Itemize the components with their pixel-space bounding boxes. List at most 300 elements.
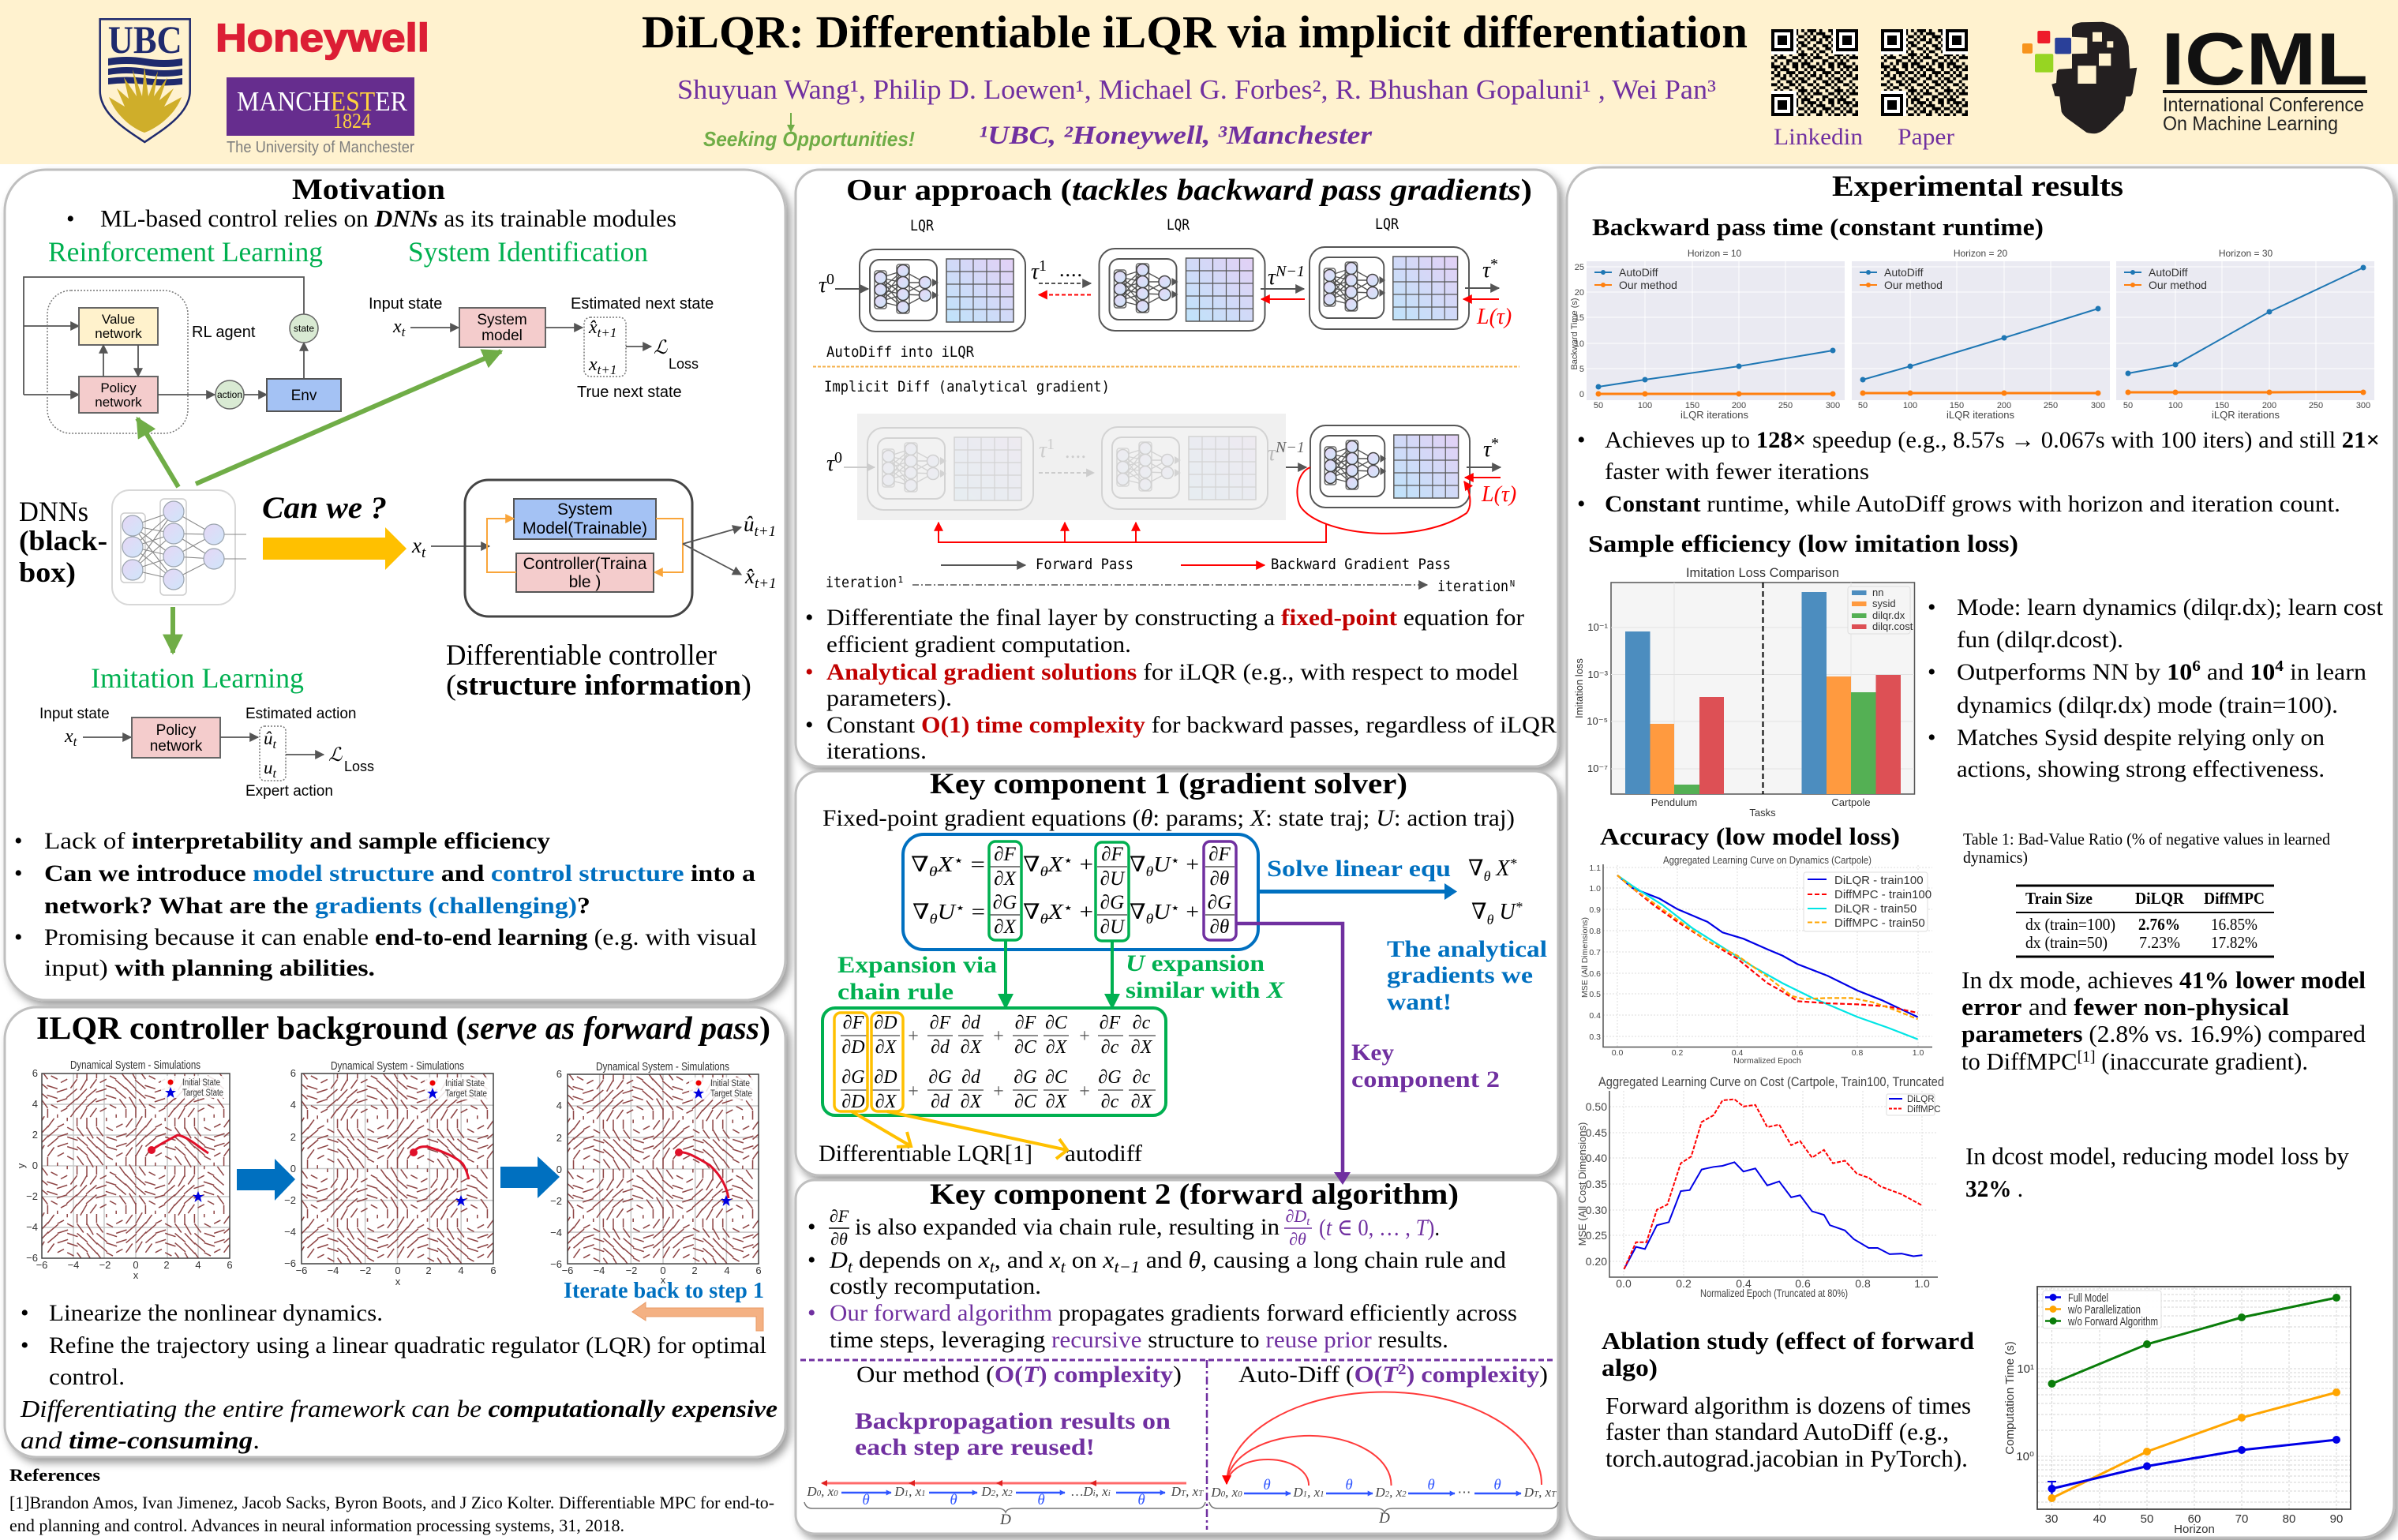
- diagram: system identification: x: [589, 354, 598, 375]
- references: [1]Brandon Amos, Ivan Jimenez, Jacob Sacks, Byron Boots, and J Zico Kolter. Differentiable MPC for end-to-: [9, 1493, 774, 1512]
- icon: UBC crest: UBC: [108, 17, 182, 62]
- chart: horizon 20: 50: [1858, 401, 1868, 410]
- QR code: paper: [1881, 29, 1968, 116]
- diagram: auto-diff chain: D1, x1: [1292, 1485, 1325, 1500]
- diagram: autodiff into iLQR: τ: [819, 273, 826, 298]
- callout: iterate back: Iterate back to step 1: [564, 1279, 764, 1303]
- diagram: differentiable controller: t+1: [755, 575, 777, 592]
- label: can we: Can we ?: [262, 491, 387, 525]
- chart: horizon 20: 300: [2091, 401, 2105, 410]
- chart: simulation iteration 3: x: [661, 1274, 666, 1286]
- chart: imitation loss comparison: sysid: [1872, 598, 1896, 609]
- chart: horizon 20: Horizon = 20: [1954, 248, 2008, 259]
- subheading: ablation study: Ablation study (effect of forward: [1602, 1327, 1974, 1355]
- callout: backpropagation reuse: [855, 1408, 1171, 1460]
- chart: learning curve on dynamics: 0.2: [1672, 1048, 1683, 1058]
- bullets: key component 2: depends on: [852, 1247, 979, 1273]
- chart: ablation computation time: 70: [2235, 1512, 2248, 1526]
- chart: horizon 30: AutoDiff: [2149, 266, 2188, 279]
- diagram: RL agent: network: [95, 326, 142, 341]
- chart: learning curve on cost: 0.40: [1586, 1152, 1607, 1164]
- chart: learning curve on cost: 0.50: [1586, 1100, 1607, 1113]
- bullets: ILQR: Refine the trajectory using a linear quadratic regulator (LQR) for optimal: [49, 1332, 766, 1358]
- diagram: auto-diff chain: θ: [1493, 1477, 1501, 1493]
- equation: chain rule expansion: ∂c: [1133, 1013, 1151, 1033]
- label: expansion via chain rule: Expansion via: [837, 952, 997, 978]
- chart: learning curve on dynamics: 1.1: [1589, 864, 1601, 873]
- diagram: autodiff into iLQR: ....: [1059, 258, 1082, 281]
- bullets: key component 2: ∂θ: [830, 1229, 848, 1249]
- chart: learning curve on dynamics: 0.6: [1792, 1048, 1803, 1058]
- logo: ICML: ICML: [2161, 17, 2368, 100]
- diagram: implicit diff: τ: [1039, 438, 1047, 463]
- chart: simulation iteration 2: −6: [296, 1265, 307, 1276]
- chart: horizon 30: 300: [2356, 401, 2370, 410]
- chart: simulation iteration 1: Dynamical System - Simulations: [70, 1059, 200, 1072]
- diagram: autodiff into iLQR: 0: [826, 271, 834, 288]
- chart: simulation iteration 2: 2: [290, 1131, 296, 1143]
- bullets: our approach: iterations.: [826, 738, 927, 764]
- equation: chain rule expansion: ∂C: [1045, 1013, 1068, 1033]
- legend: passes: Backward Gradient Pass: [1271, 556, 1451, 573]
- callout: analytical gradients wanted: The analytical: [1387, 936, 1547, 962]
- logo: University of Manchester: The University of Manchester: [227, 139, 414, 156]
- equation: fixed point system: +: [1180, 900, 1199, 924]
- panel: our approach: [796, 170, 1558, 766]
- chart: simulation iteration 2: 4: [290, 1099, 296, 1111]
- chart: learning curve on dynamics: 0.6: [1589, 969, 1601, 979]
- chart: imitation loss comparison: 10⁻¹: [1587, 621, 1609, 633]
- diagram: forward algorithm chain: D1, x1: [894, 1484, 926, 1499]
- bullets: sample efficiency: 10: [2250, 658, 2284, 685]
- bullets: key component 2: , and: [995, 1247, 1050, 1273]
- chart: simulation iteration 3: 6: [556, 1068, 562, 1080]
- bullets: our approach: Analytical gradient solutions for iLQR (e.g., with respect to model: [826, 659, 1519, 685]
- text: dx mode results: error and fewer non-physical: [1961, 993, 2289, 1021]
- equation: fixed point system: θ: [1146, 864, 1153, 879]
- equation: chain rule expansion: ∂X: [1131, 1092, 1153, 1112]
- chart: ablation computation time: w/o Forward Algorithm: [2067, 1315, 2158, 1328]
- bullets: key component 2: [807, 1206, 1517, 1353]
- chart: ablation computation time: 60: [2188, 1512, 2201, 1526]
- chart: learning curve on cost: 0.45: [1586, 1126, 1607, 1139]
- equation: chain rule expansion: +: [908, 1026, 919, 1047]
- equation: chain rule expansion: ∂c: [1101, 1092, 1119, 1112]
- chart: ablation computation time: 10¹: [2017, 1362, 2034, 1376]
- table: bad-value ratio: DiffMPC: [2204, 889, 2265, 908]
- heading: key component 1: Key component 1 (gradient solver): [930, 768, 1407, 800]
- bullets: our approach: •: [805, 712, 814, 738]
- text: ablation study: faster than standard AutoDiff (e.g.,: [1606, 1418, 1949, 1445]
- bullets: key component 2: ∂D: [1286, 1206, 1306, 1226]
- references: References: [9, 1465, 100, 1485]
- diagram: autodiff into iLQR: 1: [1039, 257, 1047, 275]
- chart: simulation iteration 1: 0: [32, 1160, 38, 1171]
- chart: horizon 10: Our method: [1619, 279, 1677, 291]
- bullets: sample efficiency: fun (dilqr.dcost).: [1957, 627, 2123, 653]
- text: dx mode results: In dx mode, achieves 41% lower model: [1961, 966, 2366, 994]
- chart: simulation iteration 2: Dynamical System - Simulations: [331, 1059, 464, 1073]
- text: dx mode results: parameters (2.8% vs. 16.9%) compared: [1961, 1020, 2366, 1047]
- bullets: key component 2: θ, causing a long chain rule and: [1189, 1247, 1489, 1273]
- text: dx mode results: (inaccurate gradient).: [2096, 1047, 2308, 1075]
- diagram: autodiff into iLQR: N−1: [1275, 263, 1305, 280]
- bullets: sample efficiency: Matches Sysid despite relying only on: [1957, 725, 2325, 751]
- bullets: our approach: parameters).: [826, 685, 952, 711]
- chart: learning curve on cost: 0.0: [1616, 1277, 1632, 1290]
- equation: fixed point system: ∂X: [994, 916, 1017, 938]
- table caption: Table 1: Bad-Value Ratio (% of negative values in learned: [1963, 830, 2330, 849]
- diagram: imitation learning: Expert action: [245, 783, 333, 800]
- text: dcost result: 32% .: [1965, 1175, 2023, 1202]
- chart: simulation iteration 3: Initial State: [710, 1079, 750, 1088]
- bullets: our approach: efficient gradient computation.: [826, 631, 1131, 658]
- diagram: RL agent: action: [217, 389, 242, 400]
- diagram: forward algorithm chain: D: [999, 1512, 1011, 1528]
- diagram: forward algorithm chain: …Di, xi: [1071, 1484, 1111, 1499]
- bullets: key component 2: ∂F: [830, 1206, 849, 1226]
- text: ablation study: torch.autograd.jacobian in PyTorch).: [1606, 1444, 1968, 1472]
- arrow: DNN to imitation learning: [170, 607, 175, 653]
- chart: simulation iteration 2: Target State: [445, 1089, 487, 1099]
- bullets: key component 2: x: [1049, 1247, 1066, 1276]
- chart: simulation iteration 3: −2: [550, 1195, 562, 1207]
- text: fixed-point equations: Fixed-point gradient equations ( θ: params; X: state traj; U: action traj): [822, 805, 1515, 831]
- bullets: sample efficiency: in learn: [2284, 659, 2366, 685]
- panel: key component 2: [796, 1178, 1558, 1534]
- equation: fixed point system: ∂G: [1100, 892, 1124, 913]
- equation: chain rule expansion: ∂c: [1133, 1067, 1151, 1088]
- chart: horizon 10: 100: [1638, 401, 1652, 410]
- bullets: key component 2: t: [848, 1257, 853, 1276]
- diagram: imitation learning: [39, 706, 374, 800]
- label: solve linear: Solve linear equ: [1267, 856, 1451, 882]
- subheading: ablation study: algo): [1602, 1354, 1658, 1381]
- equation: fixed point system: ∇: [1130, 852, 1146, 876]
- caption: differentiable controller: [446, 639, 751, 702]
- diagram: imitation learning: Loss: [344, 759, 374, 774]
- diagram: autodiff into iLQR: AutoDiff into iLQR: [826, 343, 975, 361]
- chart: simulation iteration 1: y: [15, 1163, 27, 1168]
- chart: horizon 30: 250: [2309, 401, 2323, 410]
- chart: horizon 20: [1852, 248, 2110, 421]
- diagram: implicit diff: [824, 378, 1516, 542]
- bullets: key component 2: D: [829, 1247, 853, 1276]
- equation: fixed point system: ⋆: [1063, 900, 1073, 916]
- equation: fixed point system: ∂X: [994, 868, 1017, 890]
- chart: simulation iteration 3: −6: [550, 1258, 562, 1270]
- diagram: auto-diff chain: D0, x0: [1210, 1485, 1242, 1500]
- chart: horizon 10: 10: [1575, 339, 1584, 349]
- diagram: differentiable controller: x̂: [745, 564, 755, 588]
- bullets: key component 2: and: [1140, 1247, 1189, 1273]
- diagram: RL agent: Policy: [100, 380, 137, 395]
- equation: chain rule expansion: ∂D: [874, 1013, 897, 1033]
- logo: ICML: On Machine Learning: [2163, 113, 2338, 135]
- chart: learning curve on cost: 0.4: [1736, 1277, 1752, 1290]
- diagram: imitation learning: t: [273, 767, 276, 781]
- callout: backpropagation reuse: Backpropagation results on: [855, 1408, 1171, 1434]
- bullets: motivation questions: input) with planning abilities.: [44, 955, 375, 981]
- chart: imitation loss comparison: nn: [1872, 586, 1883, 598]
- title: DiLQR: Differentiable iLQR via implicit differentiation: [642, 6, 1748, 58]
- diagram: imitation learning: u: [264, 758, 273, 777]
- chart: simulation iteration 2: 0: [395, 1265, 401, 1276]
- chart: learning curve on cost: Normalized Epoch (Truncated at 80%): [1700, 1287, 1848, 1299]
- diagram: imitation learning: network: [150, 738, 203, 755]
- arrow: iterate back: [632, 1302, 763, 1331]
- diagram: autodiff into iLQR: [819, 215, 1512, 361]
- chart: simulation iteration 1: 0: [133, 1259, 139, 1271]
- bullets: key component 2: •: [807, 1247, 816, 1273]
- chart: ablation computation time: Full Model: [2068, 1291, 2108, 1305]
- chart: horizon 10: 5: [1579, 365, 1584, 374]
- result: analytical gradients: U: [1493, 900, 1516, 924]
- logo: University of Manchester: 1824: [333, 109, 371, 133]
- heading: auto-diff complexity: 2: [1398, 1361, 1407, 1378]
- chart: horizon 10: 50: [1594, 401, 1603, 410]
- label: differentiable LQR: Differentiable LQR[1]: [819, 1141, 1032, 1167]
- bullets: sample efficiency: dynamics (dilqr.dx) mode (train=100).: [1957, 692, 2338, 718]
- chart: horizon 30: [2116, 248, 2374, 421]
- diagram: forward algorithm chain: θ: [1137, 1492, 1145, 1508]
- chart: horizon 30: 150: [2215, 401, 2229, 410]
- text: dcost result: [1965, 1142, 2349, 1202]
- diagram: system identification: t: [402, 324, 407, 339]
- heading: our approach: Our approach ( tackles backward pass gradients ): [846, 174, 1532, 207]
- bullets: sample efficiency: •: [1928, 725, 1936, 751]
- bullets: motivation questions: Can we introduce model structure and control structure into a: [44, 860, 755, 886]
- equation: fixed point system: ∂F: [1101, 844, 1124, 865]
- bullets: key component 2: t−1: [1115, 1257, 1140, 1276]
- diagram: system identification: x: [393, 317, 402, 337]
- equation: fixed point system: X: [936, 852, 954, 876]
- equation: fixed point system: θ: [1040, 911, 1048, 927]
- text: dx mode results: [1]: [2078, 1048, 2096, 1066]
- diagram: differentiable controller: System: [557, 500, 613, 519]
- diagram: auto-diff chain: D: [1378, 1510, 1390, 1527]
- bullets: key component 2: t: [1306, 1216, 1310, 1228]
- equation: chain rule expansion: ∂X: [875, 1092, 897, 1112]
- chart: ablation computation time: 80: [2283, 1512, 2295, 1526]
- chart: learning curve on cost: 0.30: [1586, 1204, 1607, 1216]
- diagram: imitation learning: x: [65, 726, 73, 747]
- chart: horizon 10: 0: [1579, 390, 1584, 399]
- equation: chain rule expansion: ∂c: [1101, 1037, 1119, 1058]
- diagram: imitation learning: Policy: [156, 722, 197, 739]
- diagram: autodiff into iLQR: L(τ): [1476, 305, 1512, 329]
- equation: fixed point system: ∇: [912, 900, 930, 924]
- arrow: solve linear: [1258, 883, 1457, 900]
- axis: iterations: iteration¹: [826, 574, 905, 591]
- chart: imitation loss comparison: dilqr.dx: [1872, 609, 1905, 621]
- chart: horizon 30: 200: [2262, 401, 2276, 410]
- subheading: system identification: System Identification: [408, 236, 648, 268]
- arrow: DNN to RL: [137, 418, 178, 487]
- chart: simulation iteration 3: 2: [556, 1132, 562, 1144]
- equation: fixed point system: ⋆: [954, 852, 964, 868]
- chart: simulation iteration 2: 6: [490, 1265, 496, 1276]
- diagram: implicit diff: 1: [1047, 436, 1055, 453]
- chart: horizon 30: Our method: [2149, 279, 2207, 291]
- chart: horizon 10: 150: [1685, 401, 1699, 410]
- diagram: differentiable controller: [411, 480, 777, 616]
- diagram: imitation learning: t: [273, 738, 276, 751]
- label: DNNs black-box: box): [19, 556, 76, 588]
- icon: neural network: [112, 490, 246, 605]
- equation: fixed point system: ∂U: [1100, 916, 1126, 938]
- arrow: purple to key component 2: [1236, 924, 1351, 1185]
- diagram: auto-diff chain: θ: [1345, 1477, 1353, 1493]
- chart: horizon 20: 100: [1903, 401, 1917, 410]
- diagram: implicit diff: τ: [1268, 441, 1276, 466]
- arrow: step 1 to step 2: [237, 1159, 295, 1201]
- chart: learning curve on dynamics: [1580, 854, 1932, 1066]
- diagram: system identification: [369, 295, 714, 401]
- chart: simulation iteration 1: 4: [195, 1259, 201, 1271]
- diagram: auto-diff chain: ⋯: [1457, 1485, 1471, 1500]
- chart: simulation iteration 3: 4: [724, 1265, 730, 1276]
- equation: chain rule expansion: ∂D: [841, 1092, 865, 1112]
- caption: differentiable controller: (structure information ): [446, 669, 751, 702]
- equation: fixed point system: θ: [930, 911, 938, 927]
- bullets: sample efficiency: Outperforms NN by 10: [1957, 659, 2190, 685]
- bullets: our approach: •: [805, 659, 814, 685]
- chart: learning curve on dynamics: 0.4: [1589, 1011, 1601, 1021]
- diagram: forward algorithm chain: θ: [950, 1492, 957, 1508]
- chart: learning curve on dynamics: 0.8: [1852, 1048, 1863, 1058]
- logo: Honeywell: Honeywell: [215, 16, 429, 60]
- equation: chain rule expansion: ∂F: [1100, 1013, 1121, 1033]
- legend: passes: [941, 556, 1451, 573]
- result: analytical gradients: *: [1516, 899, 1523, 915]
- diagram: RL agent: Value: [102, 312, 135, 327]
- logo: University of Manchester: MANCHESTER: [237, 86, 408, 117]
- diagram: implicit diff: τ: [1483, 437, 1491, 462]
- chart: simulation iteration 3: 4: [556, 1100, 562, 1111]
- heading: key component 2: Key component 2 (forward algorithm): [930, 1178, 1459, 1211]
- equation: fixed point system: U: [938, 900, 957, 924]
- chart: learning curve on dynamics: DiLQR - train100: [1834, 874, 1924, 887]
- chart: simulation iteration 2: x: [395, 1276, 401, 1287]
- subheading: reinforcement learning: Reinforcement Learning: [48, 236, 323, 268]
- icon: UBC crest: [100, 17, 190, 142]
- logo: ICML: International Conference: [2163, 94, 2364, 116]
- arrow: yellow can-we arrow: [263, 527, 407, 570]
- bullets: backward pass: Achieves up to 128× speedup (e.g., 8.57s → 0.067s with 100 iters) and still 21×: [1605, 427, 2380, 453]
- equation: fixed point system: ⋆: [1171, 900, 1180, 916]
- subheading: ablation study: [1602, 1327, 1974, 1381]
- bullets: key component 2: •: [807, 1214, 816, 1240]
- chart: horizon 30: iLQR iterations: [2212, 409, 2280, 421]
- chart: learning curve on cost: 0.6: [1795, 1277, 1811, 1290]
- label: key component 2: Key: [1351, 1040, 1394, 1066]
- chart: simulation iteration 1: 6: [227, 1259, 233, 1271]
- chart: simulation iteration 3: −2: [626, 1265, 637, 1276]
- diagram: autodiff into iLQR: τ: [1268, 265, 1276, 290]
- result: analytical gradients: [1468, 856, 1523, 927]
- bullets: our approach: Constant O(1) time complexity for backward passes, regardless of iLQR: [826, 712, 1557, 738]
- arrow: to autodiff: [887, 1111, 1067, 1159]
- bullets: key component 2: x: [978, 1247, 995, 1276]
- diagram: differentiable controller: x: [412, 534, 422, 557]
- equation: fixed point system: +: [1180, 852, 1199, 876]
- chart: simulation iteration 3: Dynamical System - Simulations: [596, 1060, 729, 1074]
- bullets: key component 2: x: [1102, 1247, 1140, 1276]
- bullets: backward pass: •: [1577, 491, 1586, 517]
- bullets: backward pass: Constant runtime, while AutoDiff grows with horizon and iteration count.: [1605, 491, 2340, 517]
- chart: horizon 10: 25: [1575, 263, 1584, 272]
- table: bad-value ratio: DiLQR: [2135, 889, 2185, 908]
- bullets: backward pass: [1577, 427, 2380, 517]
- chart: learning curve on cost: 0.20: [1586, 1255, 1607, 1268]
- chart: simulation iteration 1: 4: [32, 1098, 38, 1110]
- equation: chain rule expansion: ∂d: [931, 1092, 950, 1112]
- chart: horizon 10: Horizon = 10: [1688, 248, 1742, 259]
- diagram: differentiable controller: Controller(Traina: [523, 555, 647, 573]
- diagram: auto-diff chain: θ: [1263, 1477, 1271, 1493]
- chart: imitation loss comparison: Tasks: [1749, 807, 1776, 819]
- panel: motivation: [5, 170, 785, 1000]
- subheading: imitation learning: Imitation Learning: [91, 662, 304, 694]
- heading: our method complexity: Our method ( O(T) complexity ): [856, 1362, 1182, 1388]
- bullets: key component 2: is also expanded via chain rule, resulting in: [855, 1214, 1280, 1240]
- chart: simulation iteration 2: −6: [284, 1257, 296, 1269]
- chart: imitation loss comparison: Pendulum: [1651, 796, 1697, 808]
- chart: learning curve on dynamics: 0.0: [1612, 1048, 1623, 1058]
- diagram: imitation learning: Input state: [39, 706, 110, 722]
- legend: passes: Forward Pass: [1036, 556, 1133, 573]
- diagram: autodiff into iLQR: LQR: [1167, 216, 1190, 234]
- diagram: autodiff into iLQR: LQR: [910, 217, 934, 234]
- diagram: differentiable controller: t+1: [755, 523, 776, 540]
- label: U expansion: [1126, 950, 1285, 1003]
- chart: ablation computation time: [2003, 1287, 2351, 1536]
- equation: chain rule expansion: ∂X: [875, 1037, 897, 1058]
- label: DNNs black-box: DNNs: [19, 496, 88, 527]
- bullets: key component 2: time steps, leveraging recursive structure to reuse prior results.: [830, 1327, 1448, 1353]
- table caption: [1963, 830, 2330, 867]
- equation: chain rule expansion: ∂d: [931, 1037, 950, 1058]
- chart: simulation iteration 3: Target State: [710, 1089, 752, 1099]
- panel: key component 1: [796, 768, 1558, 1175]
- chart: simulation iteration 3: −6: [562, 1265, 573, 1276]
- chart: horizon 10: iLQR iterations: [1680, 409, 1748, 421]
- chart: learning curve on cost: DiffMPC: [1907, 1105, 1941, 1115]
- diagram: system identification: x̂: [589, 317, 598, 338]
- bullets: key component 2: t: [1061, 1257, 1066, 1276]
- diagram: auto-diff chain: [1209, 1392, 1558, 1527]
- chart: learning curve on cost: 0.25: [1586, 1229, 1607, 1242]
- chart: simulation iteration 1: −6: [36, 1259, 47, 1271]
- chart: imitation loss comparison: Imitation loss: [1573, 658, 1585, 718]
- chart: ablation computation time: w/o Parallelization: [2067, 1303, 2141, 1317]
- chart: learning curve on dynamics: 0.5: [1589, 990, 1601, 999]
- chart: horizon 20: 250: [2044, 401, 2058, 410]
- table: bad-value ratio: 7.23%: [2139, 933, 2180, 952]
- bullet: ML-based control: •: [66, 206, 75, 232]
- equation: fixed point system: ∇: [1130, 900, 1146, 924]
- chart: horizon 10: 250: [1778, 401, 1793, 410]
- chart: simulation iteration 1: −2: [99, 1259, 111, 1271]
- equation: fixed point system: ⋆: [1171, 852, 1180, 868]
- diagram: auto-diff chain: D2, x2: [1374, 1485, 1407, 1500]
- equation: chain rule expansion: ∂D: [841, 1037, 865, 1058]
- chart: simulation iteration 2: −2: [360, 1265, 371, 1276]
- chart: simulation iteration 3: −4: [594, 1265, 605, 1276]
- diagram: differentiable controller: Model(Trainable): [523, 519, 647, 538]
- equation: chain rule expansion: +: [1079, 1026, 1090, 1047]
